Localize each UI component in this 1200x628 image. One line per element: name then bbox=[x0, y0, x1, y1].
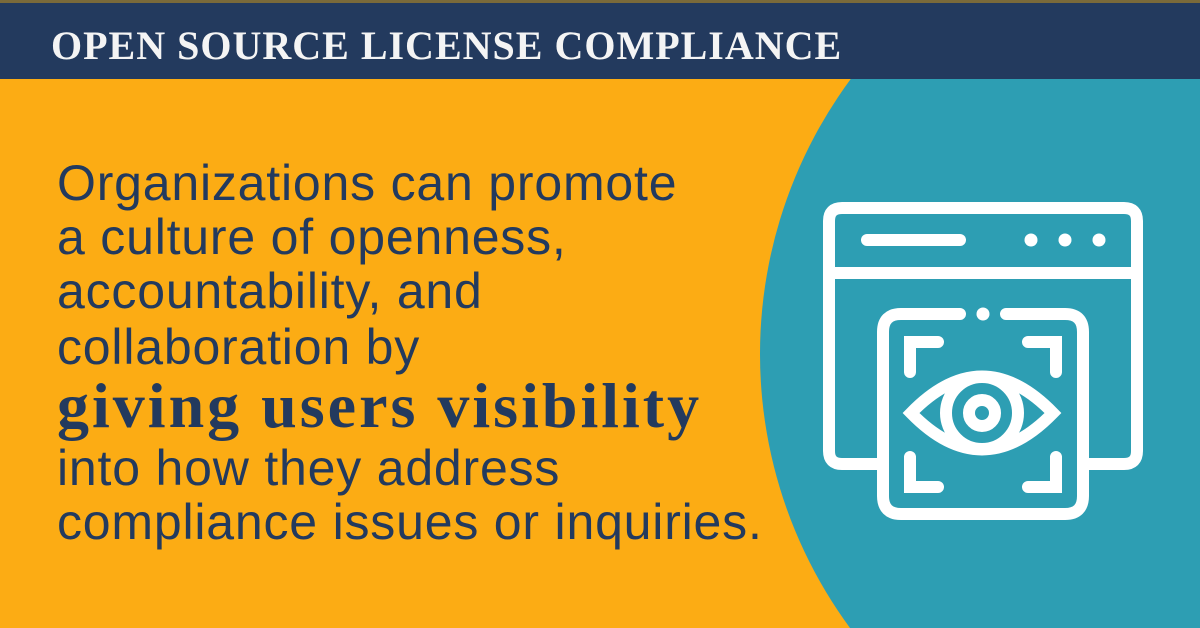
body text: compliance issues or inquiries. bbox=[57, 494, 763, 550]
body text bbox=[57, 155, 763, 550]
body text: into how they address bbox=[57, 440, 560, 496]
header band bbox=[0, 0, 1200, 79]
body text: collaboration by bbox=[57, 319, 420, 375]
body text: a culture of openness, bbox=[57, 209, 567, 265]
body text: accountability, and bbox=[57, 263, 483, 319]
title: OPEN SOURCE LICENSE COMPLIANCE bbox=[51, 23, 842, 68]
body text: giving users visibility bbox=[57, 370, 702, 441]
body text: Organizations can promote bbox=[57, 155, 677, 211]
